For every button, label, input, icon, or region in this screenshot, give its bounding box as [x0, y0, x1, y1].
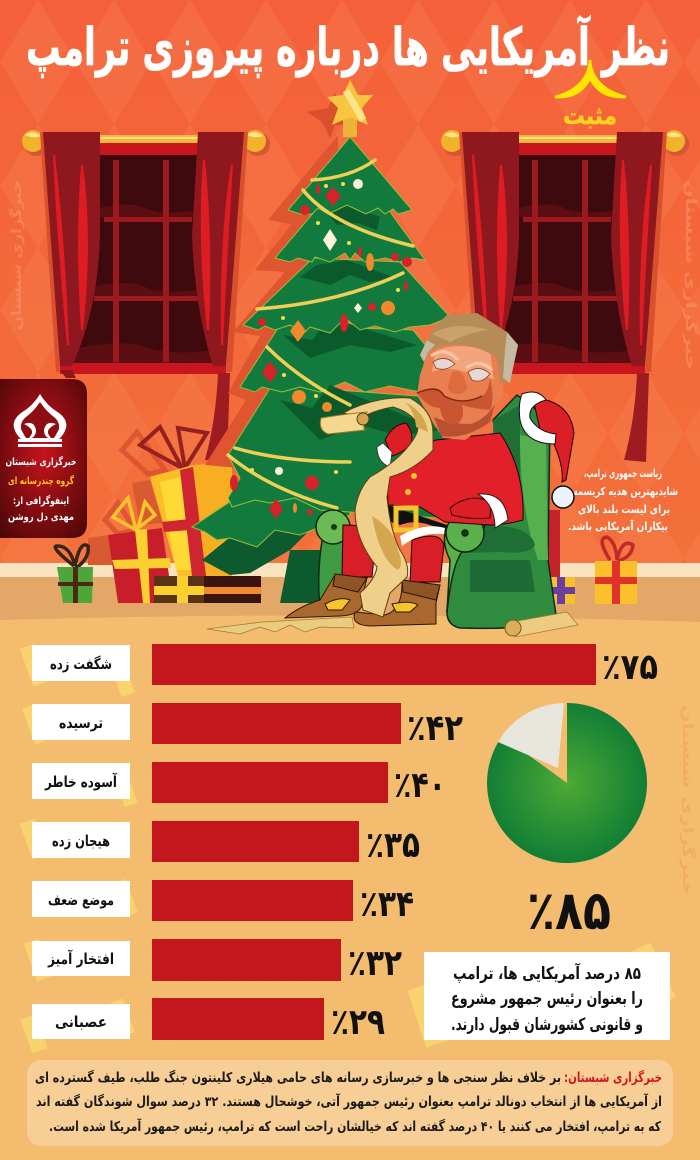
logo panel: اینفوگرافی از: — [13, 494, 69, 507]
caption beside chair — [566, 467, 678, 533]
trump head — [417, 313, 518, 440]
chair — [316, 395, 557, 628]
row: excited: ٪۳۵ — [366, 825, 420, 866]
row: scared — [32, 703, 463, 749]
row: shocked — [32, 644, 658, 688]
row: scared: ترسیده — [59, 714, 103, 732]
pie chart — [487, 703, 647, 863]
floor — [0, 577, 700, 1160]
news text block — [27, 1060, 673, 1146]
row: shocked: شگفت زده — [50, 655, 112, 673]
watermark right: خبرگزاری شبستان — [682, 180, 700, 370]
callout: ۸۵ درصد آمریکایی ها، ترامپ — [453, 962, 641, 984]
logo panel: مهدی دل روشن — [8, 512, 74, 523]
ornaments — [230, 184, 412, 519]
skirting board — [0, 563, 700, 577]
lower dark tier — [202, 480, 340, 575]
news text block: خبرگزاری شبستان: — [564, 1069, 662, 1086]
logo panel: گروه چندرسانه ای — [8, 474, 74, 487]
tier 2 — [275, 205, 425, 262]
tier 1 — [288, 137, 412, 214]
tree — [192, 135, 470, 603]
left window — [22, 130, 270, 462]
row: proud: افتخار آمیز — [47, 950, 114, 968]
star — [307, 80, 373, 138]
logo panel: خبرگزاری شبستان — [6, 455, 76, 468]
row: weak position: ٪۳۴ — [360, 884, 414, 925]
caption beside chair: برای لیست بلند بالای — [578, 503, 670, 516]
row: weak position: موضع ضعف — [48, 891, 114, 909]
icon: shabestan logo — [14, 394, 66, 447]
row: excited: هیجان زده — [52, 832, 110, 850]
row: excited — [32, 821, 420, 866]
news text block: که به ترامپ، افتخار می کنند یا ۴۰ درصد گفته اند که خیالشان راحت است که ترامپ، رئیس جمهور آمریکا شده است. — [49, 1118, 661, 1135]
row: relieved — [32, 762, 446, 806]
caption beside chair: بیکاران آمریکایی باشد. — [568, 519, 668, 533]
callout: را بعنوان رئیس جمهور مشروع — [451, 989, 643, 1009]
tree trunk block — [280, 550, 345, 603]
tier 4b — [228, 385, 470, 520]
insertion mark: positive — [555, 60, 626, 130]
callout — [424, 952, 670, 1040]
decorative tape — [20, 643, 676, 1054]
row: shocked: ٪۷۵ — [602, 647, 658, 688]
santa hat — [519, 392, 574, 508]
bar chart — [32, 644, 658, 1043]
row: proud — [32, 939, 402, 984]
gifts right — [520, 510, 637, 604]
row: proud: ٪۳۲ — [348, 943, 402, 984]
row: angry: ٪۲۹ — [331, 1002, 385, 1043]
watermark left: خبرگزاری شبستان — [8, 180, 25, 330]
row: weak position — [32, 880, 414, 925]
boots — [285, 574, 440, 626]
floor paper left — [207, 617, 354, 634]
scroll — [320, 398, 433, 617]
floor paper right — [505, 612, 578, 637]
background wall — [0, 0, 700, 566]
row: relieved: ٪۴۰ — [394, 765, 446, 806]
garlands — [228, 160, 413, 508]
gifts left — [55, 427, 261, 603]
tier 4 — [240, 325, 470, 400]
santa body — [342, 423, 523, 582]
pie value: ٪۸۵ — [527, 879, 611, 942]
row: relieved: آسوده خاطر — [44, 773, 118, 791]
logo panel — [0, 379, 87, 538]
news text block: بر خلاف نظر سنجی ها و خبرسازی رسانه های حامی هیلاری کلینتون جنگ طلب، طیف گسترده ای — [35, 1069, 561, 1086]
watermark lower right: خبرگزاری شبستان — [679, 705, 697, 895]
insertion mark: positive: مثبت — [563, 101, 617, 130]
right window — [441, 130, 689, 462]
row: scared: ٪۴۲ — [407, 708, 463, 749]
row: angry — [32, 998, 385, 1043]
tier 3 — [243, 258, 450, 333]
tier 5 — [192, 480, 350, 547]
tree shadow — [205, 135, 340, 470]
row: angry: عصبانی — [55, 1013, 107, 1031]
